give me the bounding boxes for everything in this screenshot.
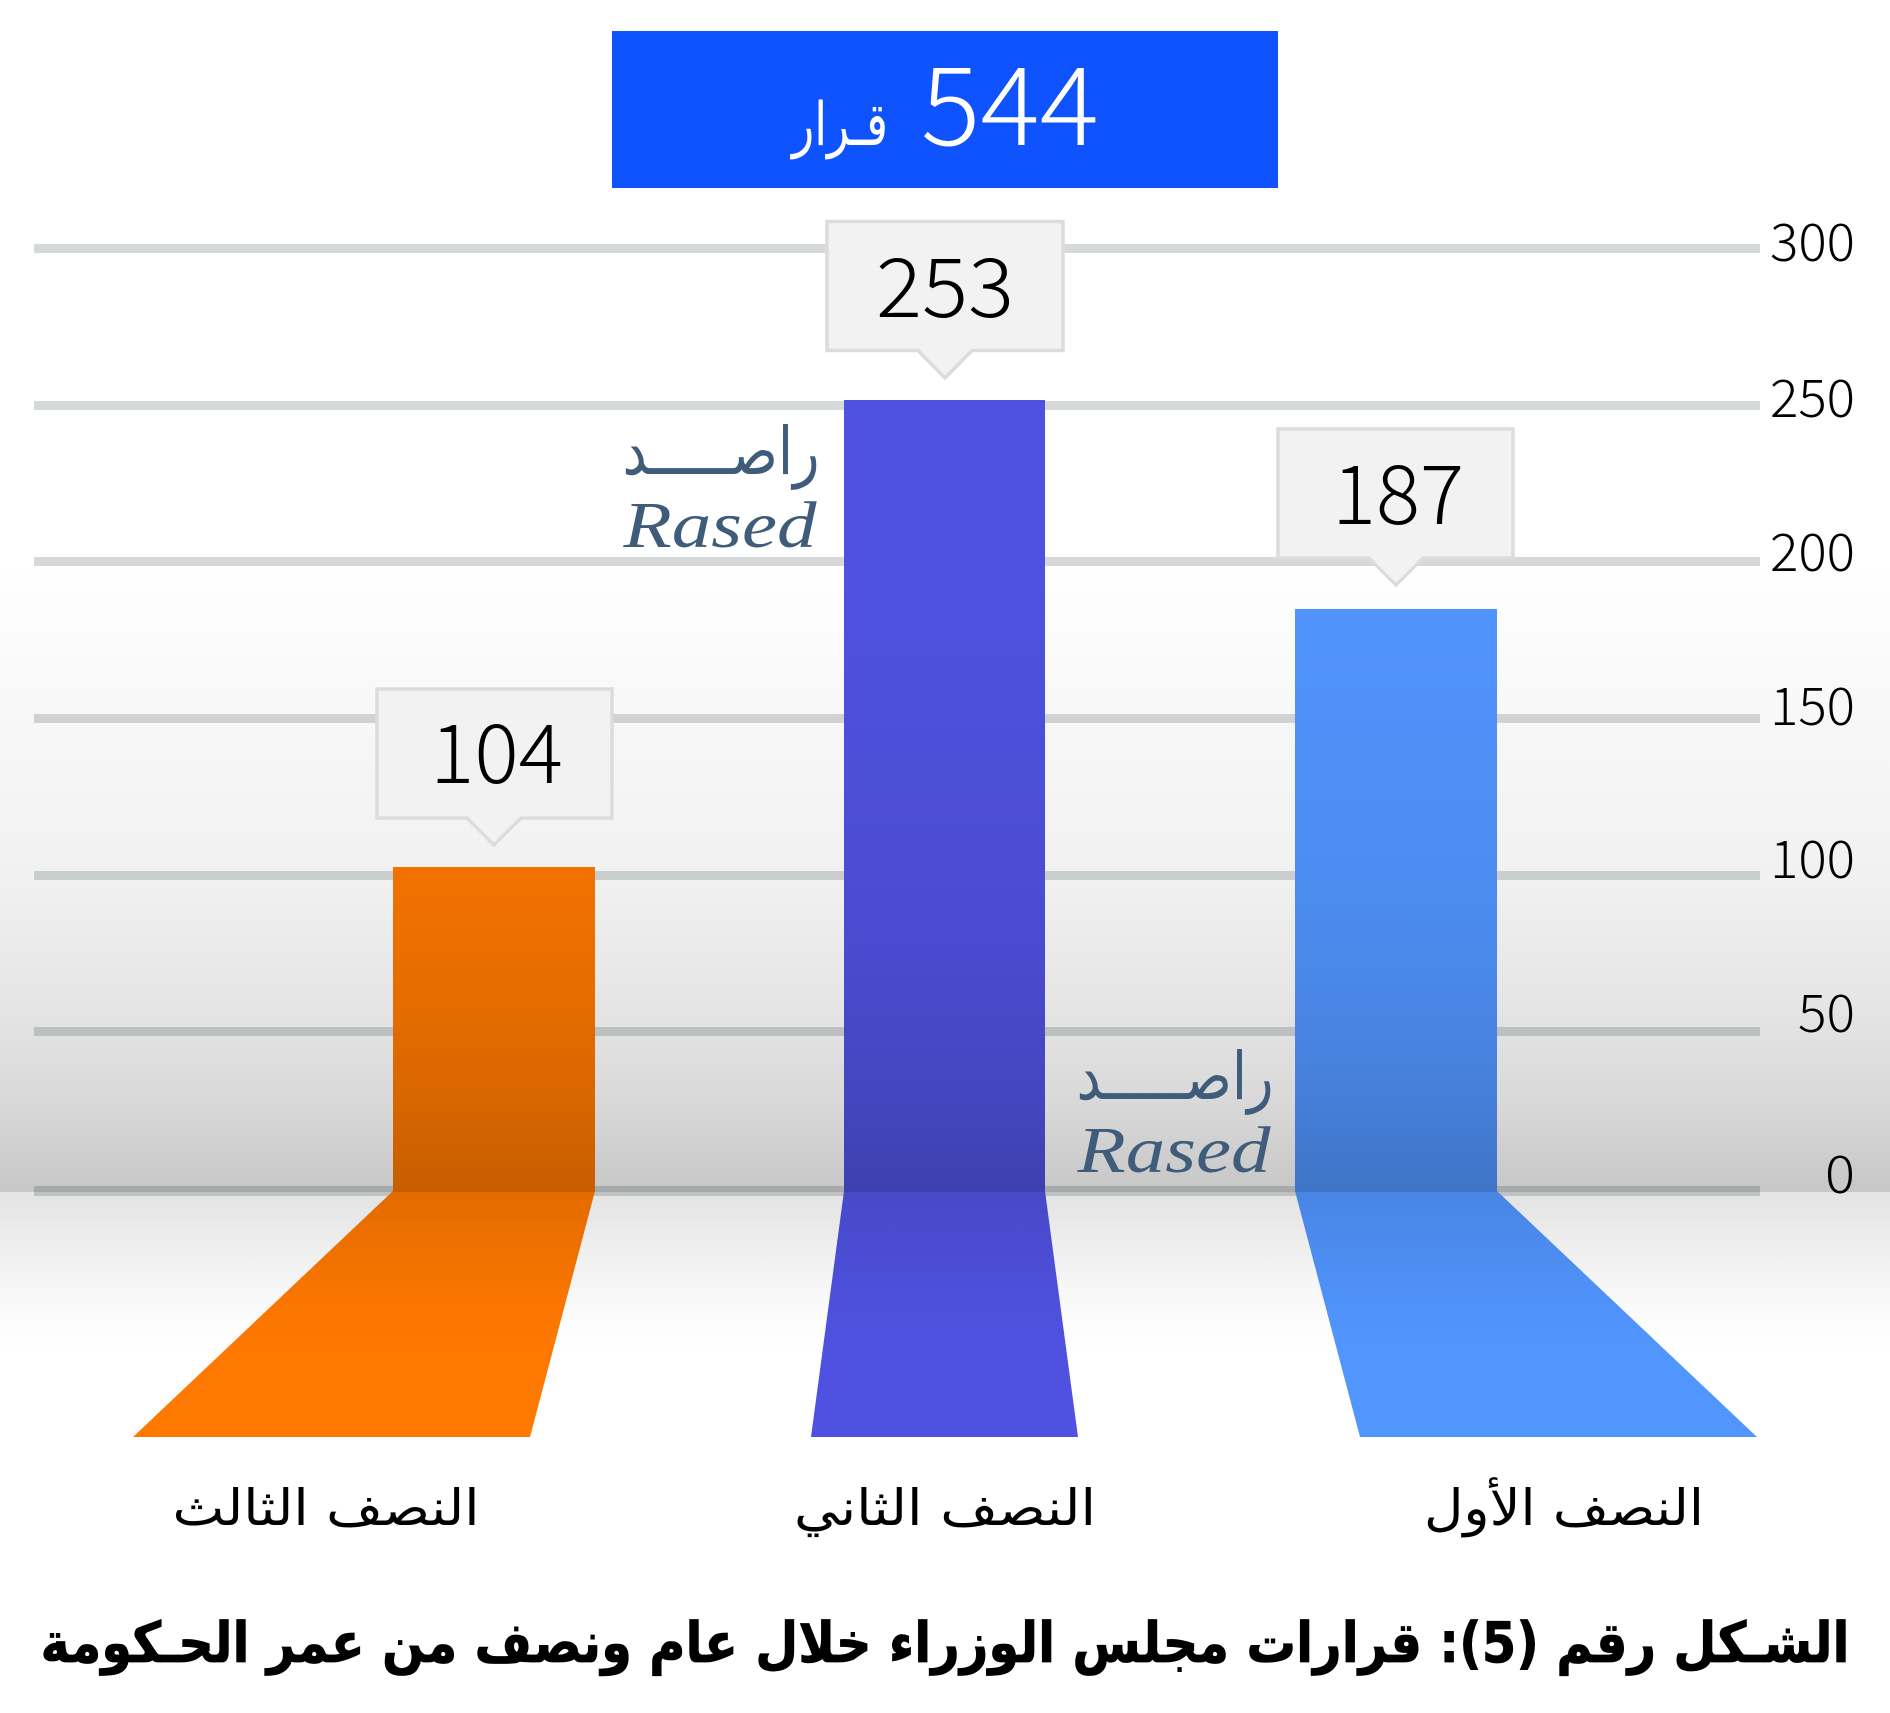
y axis labels: 0 [1825,1133,1855,1208]
callout: 104 [377,688,612,845]
bar: first half (blue) [1295,609,1757,1437]
figure caption: الشـكل رقم (5): قرارات مجلس الوزراء خلال عام ونصف من عمر الحـكومة [40,1611,1850,1676]
bar: third half (orange) [133,867,595,1437]
watermark: Rased lower: Rased [1076,1114,1272,1187]
total number: 544 [921,20,1099,177]
banner unit label: قـرار [790,90,888,160]
watermark: Rased upper [622,413,820,562]
watermark: Rased upper: Rased [622,489,818,562]
y axis labels: 300 [1770,201,1855,276]
callout: 253 [827,222,1063,378]
total banner [612,20,1278,188]
y axis labels: 250 [1770,357,1855,432]
category label: second half: النصف الثاني [794,1479,1096,1537]
watermark: Rased upper: راصـــــد [622,413,820,490]
callout: 253: 253 [876,222,1014,341]
category label: third half: النصف الثالث [172,1479,480,1537]
y axis labels: 50 [1798,972,1855,1047]
callout: 104: 104 [430,688,563,807]
y axis labels [1770,201,1855,1208]
callout: 187 [1278,429,1513,585]
watermark: Rased lower [1076,1038,1274,1187]
y axis labels: 100 [1770,818,1855,893]
category label: first half: النصف الأول [1424,1477,1704,1538]
y axis labels: 150 [1770,665,1855,740]
watermark: Rased lower: راصـــــد [1076,1038,1274,1115]
callout: 187: 187 [1332,429,1464,548]
y axis labels: 200 [1770,511,1855,586]
bar: second half (purple) [811,400,1078,1437]
